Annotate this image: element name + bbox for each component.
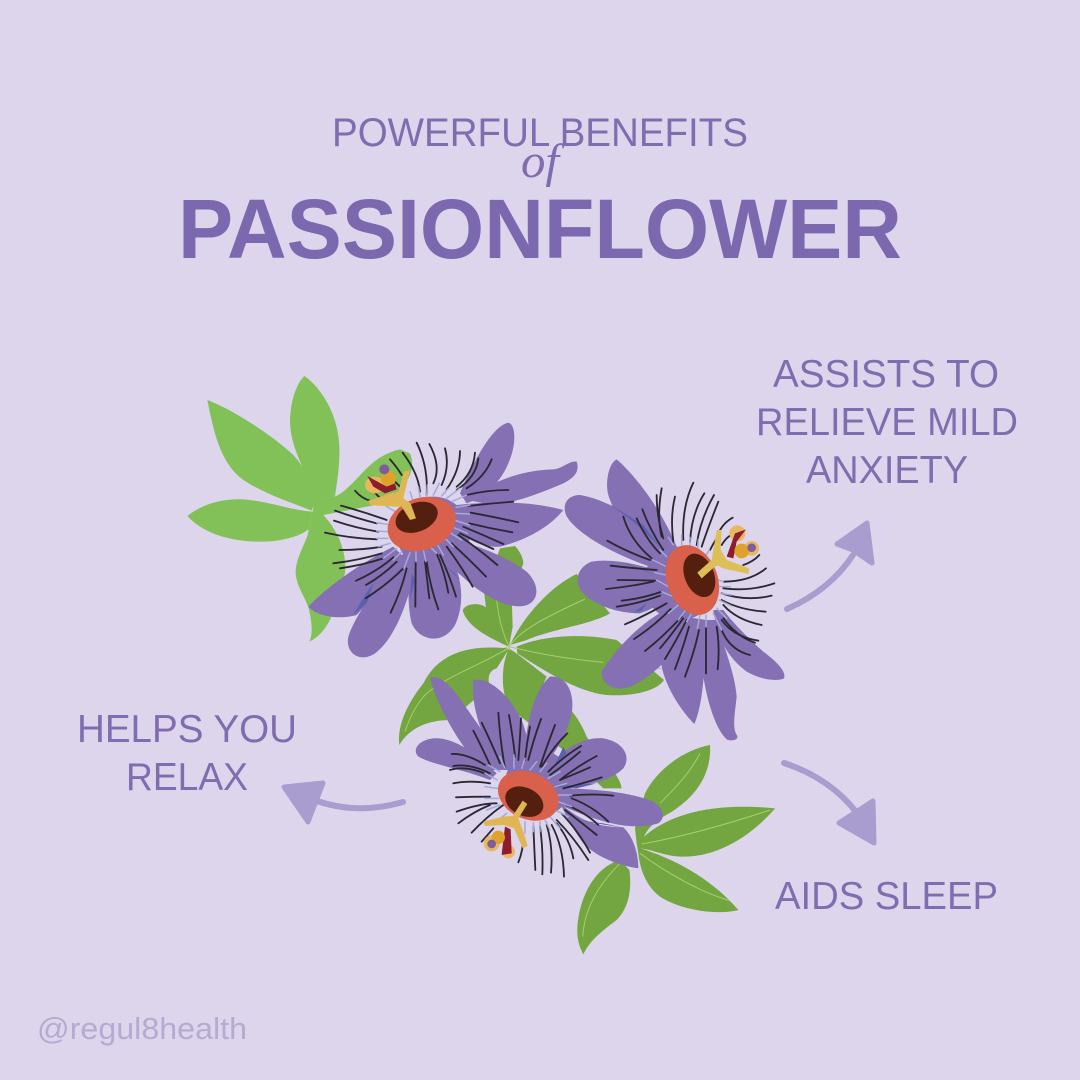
label: assists to relieve mild anxiety: ASSISTS TO	[773, 353, 999, 396]
title: passionflower: PASSIONFLOWER	[178, 182, 902, 276]
arrow: to anxiety label	[787, 523, 872, 609]
corona: inner lines	[485, 755, 572, 833]
label: assists to relieve mild anxiety: ANXIETY	[806, 449, 968, 492]
illustration: passionflower plant	[187, 376, 784, 954]
pistil and stigma	[483, 801, 528, 858]
label: assists to relieve mild anxiety: RELIEVE MILD	[756, 401, 1018, 444]
corona: filaments	[450, 713, 613, 877]
petals	[308, 423, 578, 657]
pistil and stigma	[697, 525, 759, 578]
label: aids sleep: AIDS SLEEP	[775, 875, 998, 918]
title: script of: of	[521, 135, 565, 188]
corona: ring and dark centre	[490, 761, 567, 830]
label: assists to relieve mild anxiety	[756, 353, 1018, 492]
flower: left	[308, 423, 578, 657]
arrow: to sleep label	[784, 763, 874, 843]
corona: filaments	[325, 443, 518, 613]
label: helps you relax: RELAX	[126, 756, 248, 799]
leaves: light green cluster	[187, 376, 412, 642]
corona: ring and dark centre	[380, 488, 463, 560]
corona: inner lines	[377, 483, 470, 568]
watermark handle: @regul8health	[37, 1011, 247, 1046]
flower: right	[565, 459, 784, 740]
flower: bottom	[416, 677, 663, 877]
corona: ring and dark centre	[656, 538, 728, 622]
title: powerful benefits: POWERFUL BENEFITS	[332, 111, 748, 155]
label: helps you relax	[77, 708, 297, 799]
corona: filaments	[606, 483, 774, 677]
leaves: dark green centre cluster	[460, 546, 664, 720]
petals	[565, 459, 784, 740]
label: helps you relax: HELPS YOU	[77, 708, 297, 751]
pistil and stigma	[365, 464, 416, 520]
leaves: bottom dark green cluster	[577, 745, 775, 954]
arrow: to relax label	[284, 783, 403, 822]
corona: inner lines	[653, 535, 732, 630]
petals	[416, 677, 663, 868]
